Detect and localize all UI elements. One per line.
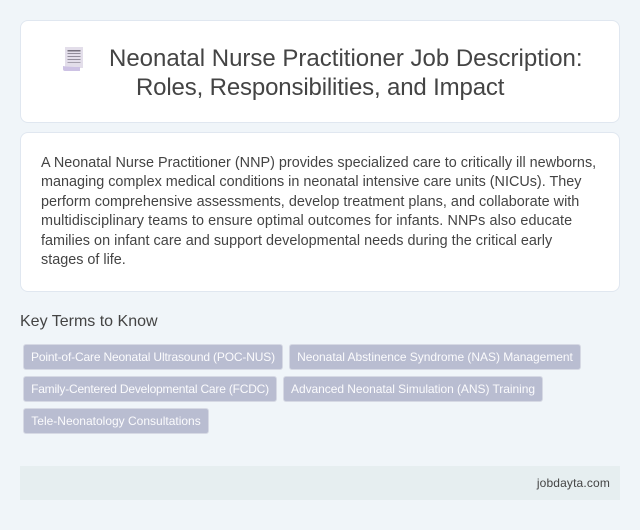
tag: FCDC: [23, 376, 277, 402]
panel: description: [20, 132, 620, 292]
tag group: key terms: [23, 344, 581, 434]
tag: ANS: [283, 376, 543, 402]
tag: NAS: [289, 344, 581, 370]
footer: [20, 466, 620, 500]
tag: NAS: Neonatal Abstinence Syndrome (NAS) Management: [297, 350, 573, 364]
text block: description: stages of life.: [41, 252, 126, 268]
heading: key terms: Key Terms to Know: [20, 313, 158, 330]
tag: tele-neonatology: Tele-Neonatology Consultations: [31, 414, 201, 428]
icon: document scroll: [63, 47, 83, 71]
text block: description: [41, 155, 596, 268]
text block: description: multidisciplinary teams to ensure optimal outcomes for infants. NNPs also educate: [41, 213, 572, 229]
text block: description: managing complex medical conditions in neonatal intensive care units (NICUs). They: [41, 174, 581, 190]
tag: tele-neonatology: [23, 408, 209, 434]
panel: header: [20, 20, 620, 123]
tag: ANS: Advanced Neonatal Simulation (ANS) Training: [291, 382, 535, 396]
title: Neonatal Nurse Practitioner Job Description:: [109, 45, 583, 72]
title: [109, 45, 583, 101]
footer credit: jobdayta.com: [537, 476, 610, 490]
tag: POC-NUS: Point-of-Care Neonatal Ultrasound (POC-NUS): [31, 350, 275, 364]
text block: description: A Neonatal Nurse Practitioner (NNP) provides specialized care to critically ill newborns,: [41, 155, 596, 171]
text block: description: families on infant care and support developmental needs during the critical early: [41, 233, 552, 249]
tag: POC-NUS: [23, 344, 283, 370]
tag: FCDC: Family-Centered Developmental Care (FCDC): [31, 382, 269, 396]
title: Roles, Responsibilities, and Impact: [136, 74, 504, 101]
text block: description: perform comprehensive assessments, develop treatment plans, and collaborate with: [41, 194, 579, 210]
